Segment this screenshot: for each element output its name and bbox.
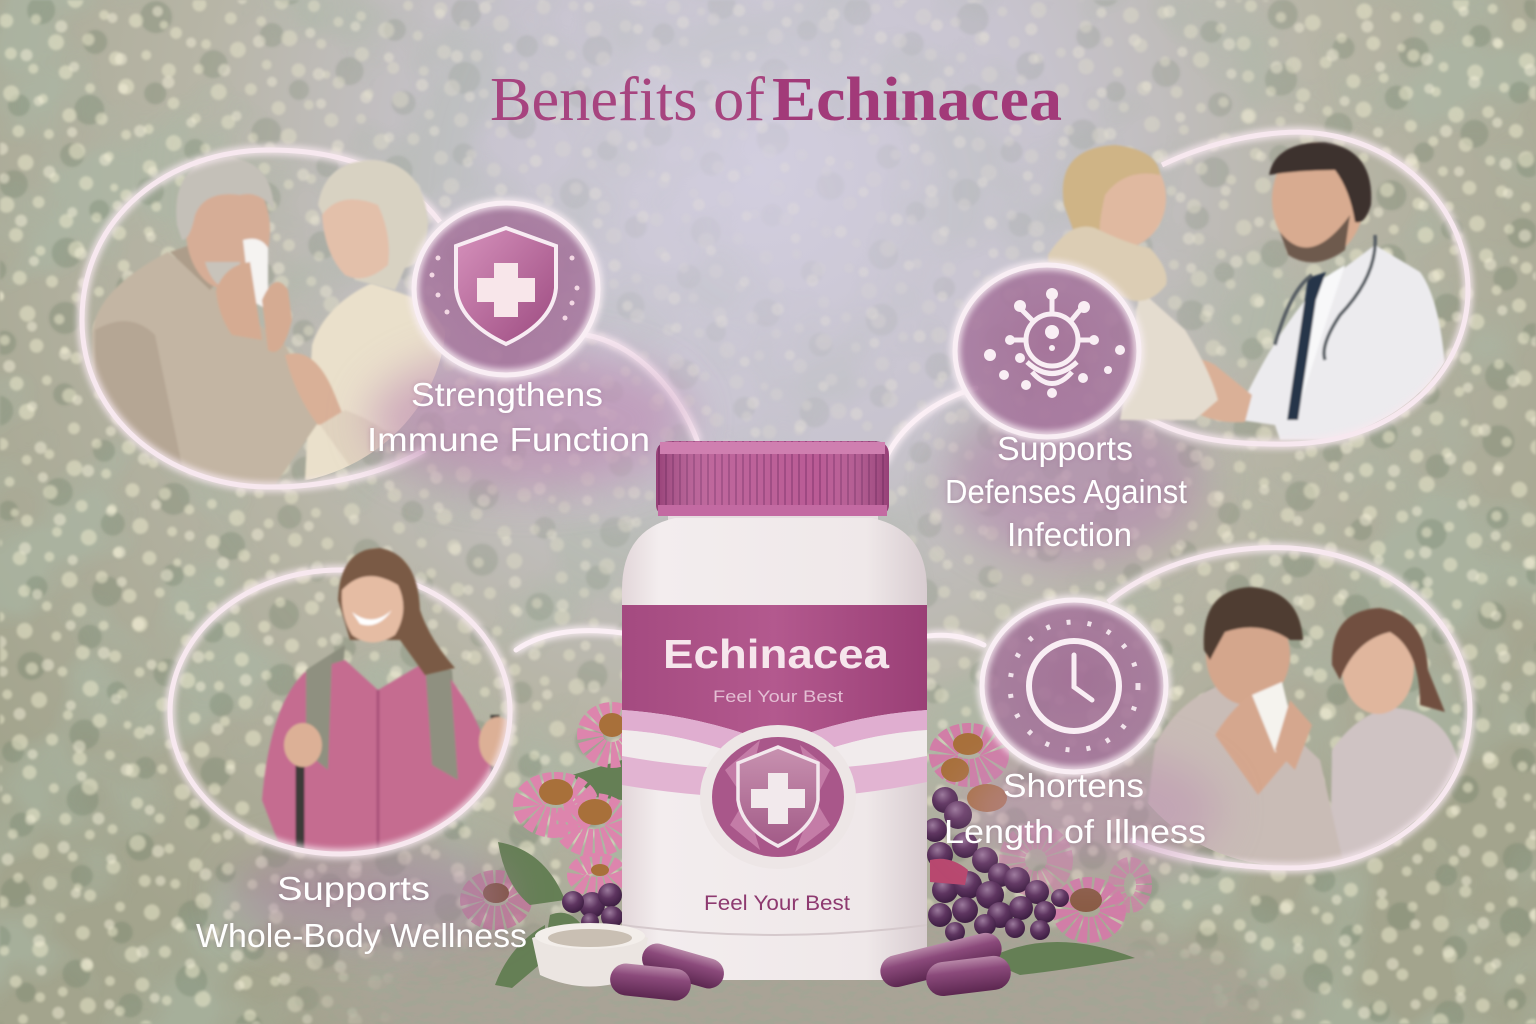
title: Echinacea [772,66,1062,134]
trekking poles [300,715,495,850]
left leaves [495,760,622,988]
label [367,376,650,458]
base groove [622,925,927,935]
man hands [216,262,292,352]
badge: shield [700,725,856,869]
label [196,870,527,954]
doctor head [1272,142,1362,248]
ring [170,570,510,854]
label: Defenses Against [945,473,1187,510]
right cones [941,733,1102,912]
ring [1108,548,1470,868]
label band [622,605,927,745]
tie [1287,272,1326,420]
label wave: white [622,730,927,780]
panel: strengthens immune function [82,150,690,490]
left ghost flower [472,882,520,918]
pink haze behind label [370,350,690,490]
left berries [562,883,623,931]
label: Whole-Body Wellness [196,917,527,954]
hands [1201,360,1253,424]
title [490,66,1062,134]
panel: shortens length of illness [944,548,1470,870]
white coat [1240,245,1448,440]
label: Supports [997,430,1133,467]
man head [186,194,271,288]
photo: woman with scarf [1048,145,1218,420]
tissue [243,239,268,310]
bottle cap [656,441,889,516]
hands [284,723,322,767]
backpack straps [318,646,454,681]
label: Supports [277,870,430,907]
woman head [318,160,428,290]
left echinacea flowers [528,715,634,887]
bottle neck [668,500,878,540]
capsules [609,929,1013,1002]
bottle body [622,518,927,980]
stethoscope [1275,235,1375,360]
label [945,430,1187,553]
label: Immune Function [367,421,650,458]
woman head [1342,622,1414,714]
supplement bottle [622,441,927,980]
sweaters [1330,708,1460,870]
bottle name: Echinacea [663,631,890,677]
right flowers [943,737,1144,930]
right leaves [985,942,1135,975]
label: Strengthens [411,376,603,413]
hibiscus petal [930,859,968,885]
bottom tagline: Feel Your Best [704,892,850,915]
woman body [304,284,442,480]
man head [1205,626,1291,704]
icon: virus [955,265,1139,437]
ground [290,902,1304,1024]
flowers and berries [472,713,1144,988]
photo: older couple [92,160,442,482]
photo: hiker [262,645,517,860]
hiker head [338,548,455,675]
pink haze behind label [950,400,1200,560]
pink haze behind label [960,750,1220,870]
flower cones [483,713,625,903]
label: Length of Illness [944,813,1206,850]
bowl of capsules [532,923,648,986]
man sweater [92,252,320,485]
ring [1135,132,1468,444]
photo: doctor [1201,140,1446,440]
title: Benefits of [490,66,765,134]
pink haze behind label [230,845,510,945]
ring [82,150,440,487]
icon: shield with cross [414,203,598,375]
panel: supports defenses against infection [945,132,1468,560]
right berries [923,787,1069,942]
label [944,767,1206,850]
woman hand and sleeve [285,353,345,425]
jacket [262,660,498,860]
label: Infection [1007,516,1132,553]
photo: couple with tissue [1140,587,1460,870]
tagline: Feel Your Best [713,687,843,706]
label wave: second pink [622,756,927,798]
label: Shortens [1003,767,1144,804]
hands and tissue [1215,685,1300,795]
icon: clock [982,600,1166,772]
connector curves [516,335,984,650]
label wave: first pink [622,710,927,770]
panel: supports whole-body wellness [170,548,527,954]
